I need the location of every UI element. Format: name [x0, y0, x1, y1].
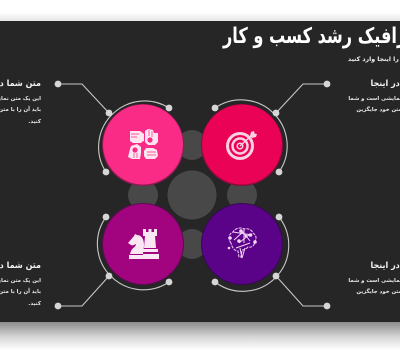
connector: top left	[58, 84, 169, 172]
text block: top left	[0, 78, 42, 125]
center hub circles	[128, 130, 257, 259]
disc: violet	[201, 203, 283, 285]
disc: pink	[102, 104, 184, 186]
connector dots	[55, 81, 330, 309]
connector: bottom right	[215, 217, 327, 306]
icon: brain	[228, 228, 257, 258]
icon: target	[228, 131, 257, 158]
text block: top right	[348, 78, 400, 113]
text block: bottom left: کنید.	[28, 301, 41, 307]
icon: chess pieces	[128, 229, 159, 259]
connector: top right	[215, 84, 327, 172]
text block: bottom left	[0, 260, 42, 307]
text block: top left: کنید.	[28, 119, 41, 125]
text block: bottom right	[348, 260, 400, 295]
connector: bottom left	[58, 217, 169, 306]
icon: hands	[128, 129, 158, 159]
disc: magenta	[102, 203, 184, 285]
disc: red	[201, 104, 283, 186]
